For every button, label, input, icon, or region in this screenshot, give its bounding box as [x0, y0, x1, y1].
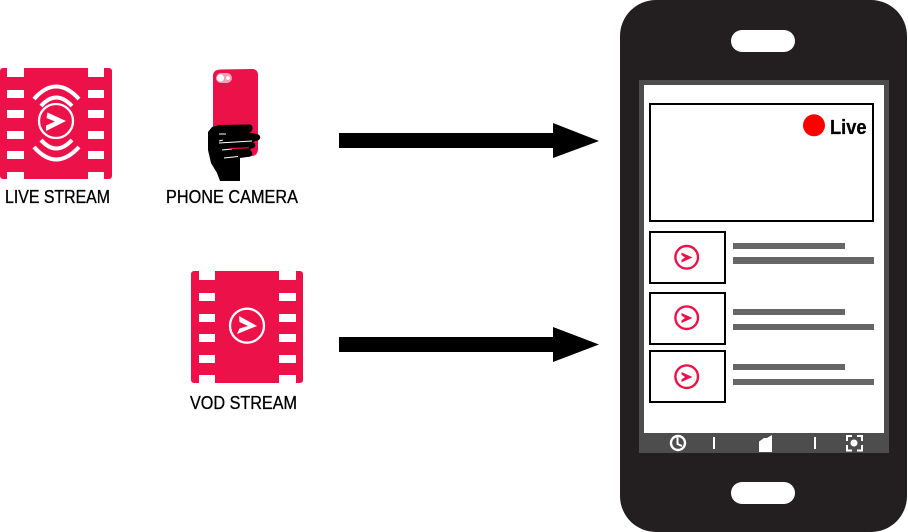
- divider bar left: [713, 437, 715, 449]
- icon: clock: [671, 436, 685, 450]
- phone body: [213, 69, 258, 156]
- icon: focus: [847, 436, 862, 450]
- screen: [644, 85, 884, 433]
- icon: vod stream film: [191, 271, 303, 383]
- phone: [620, 0, 907, 532]
- label: vod stream: VOD STREAM: [190, 393, 297, 413]
- live text: Live: [830, 116, 866, 139]
- phone body: [620, 0, 907, 532]
- hand: [208, 124, 260, 181]
- home button: [731, 482, 795, 504]
- arrow: live to phone: [339, 123, 599, 158]
- video item 1: [650, 232, 874, 283]
- label: phone camera: PHONE CAMERA: [166, 187, 298, 207]
- video item 3: [650, 351, 874, 402]
- video item 2: [650, 293, 874, 344]
- live dot: [803, 114, 825, 136]
- screen frame: [639, 80, 889, 453]
- divider bar right: [814, 437, 816, 449]
- arrow: vod to phone: [339, 327, 599, 362]
- icon: signal: [759, 435, 772, 452]
- live video panel: [650, 104, 873, 221]
- icon: live stream film: [0, 68, 112, 179]
- speaker: [731, 30, 795, 52]
- label: live stream: LIVE STREAM: [5, 187, 110, 207]
- icon: phone camera in hand: [208, 69, 260, 181]
- camera lenses: [216, 73, 232, 83]
